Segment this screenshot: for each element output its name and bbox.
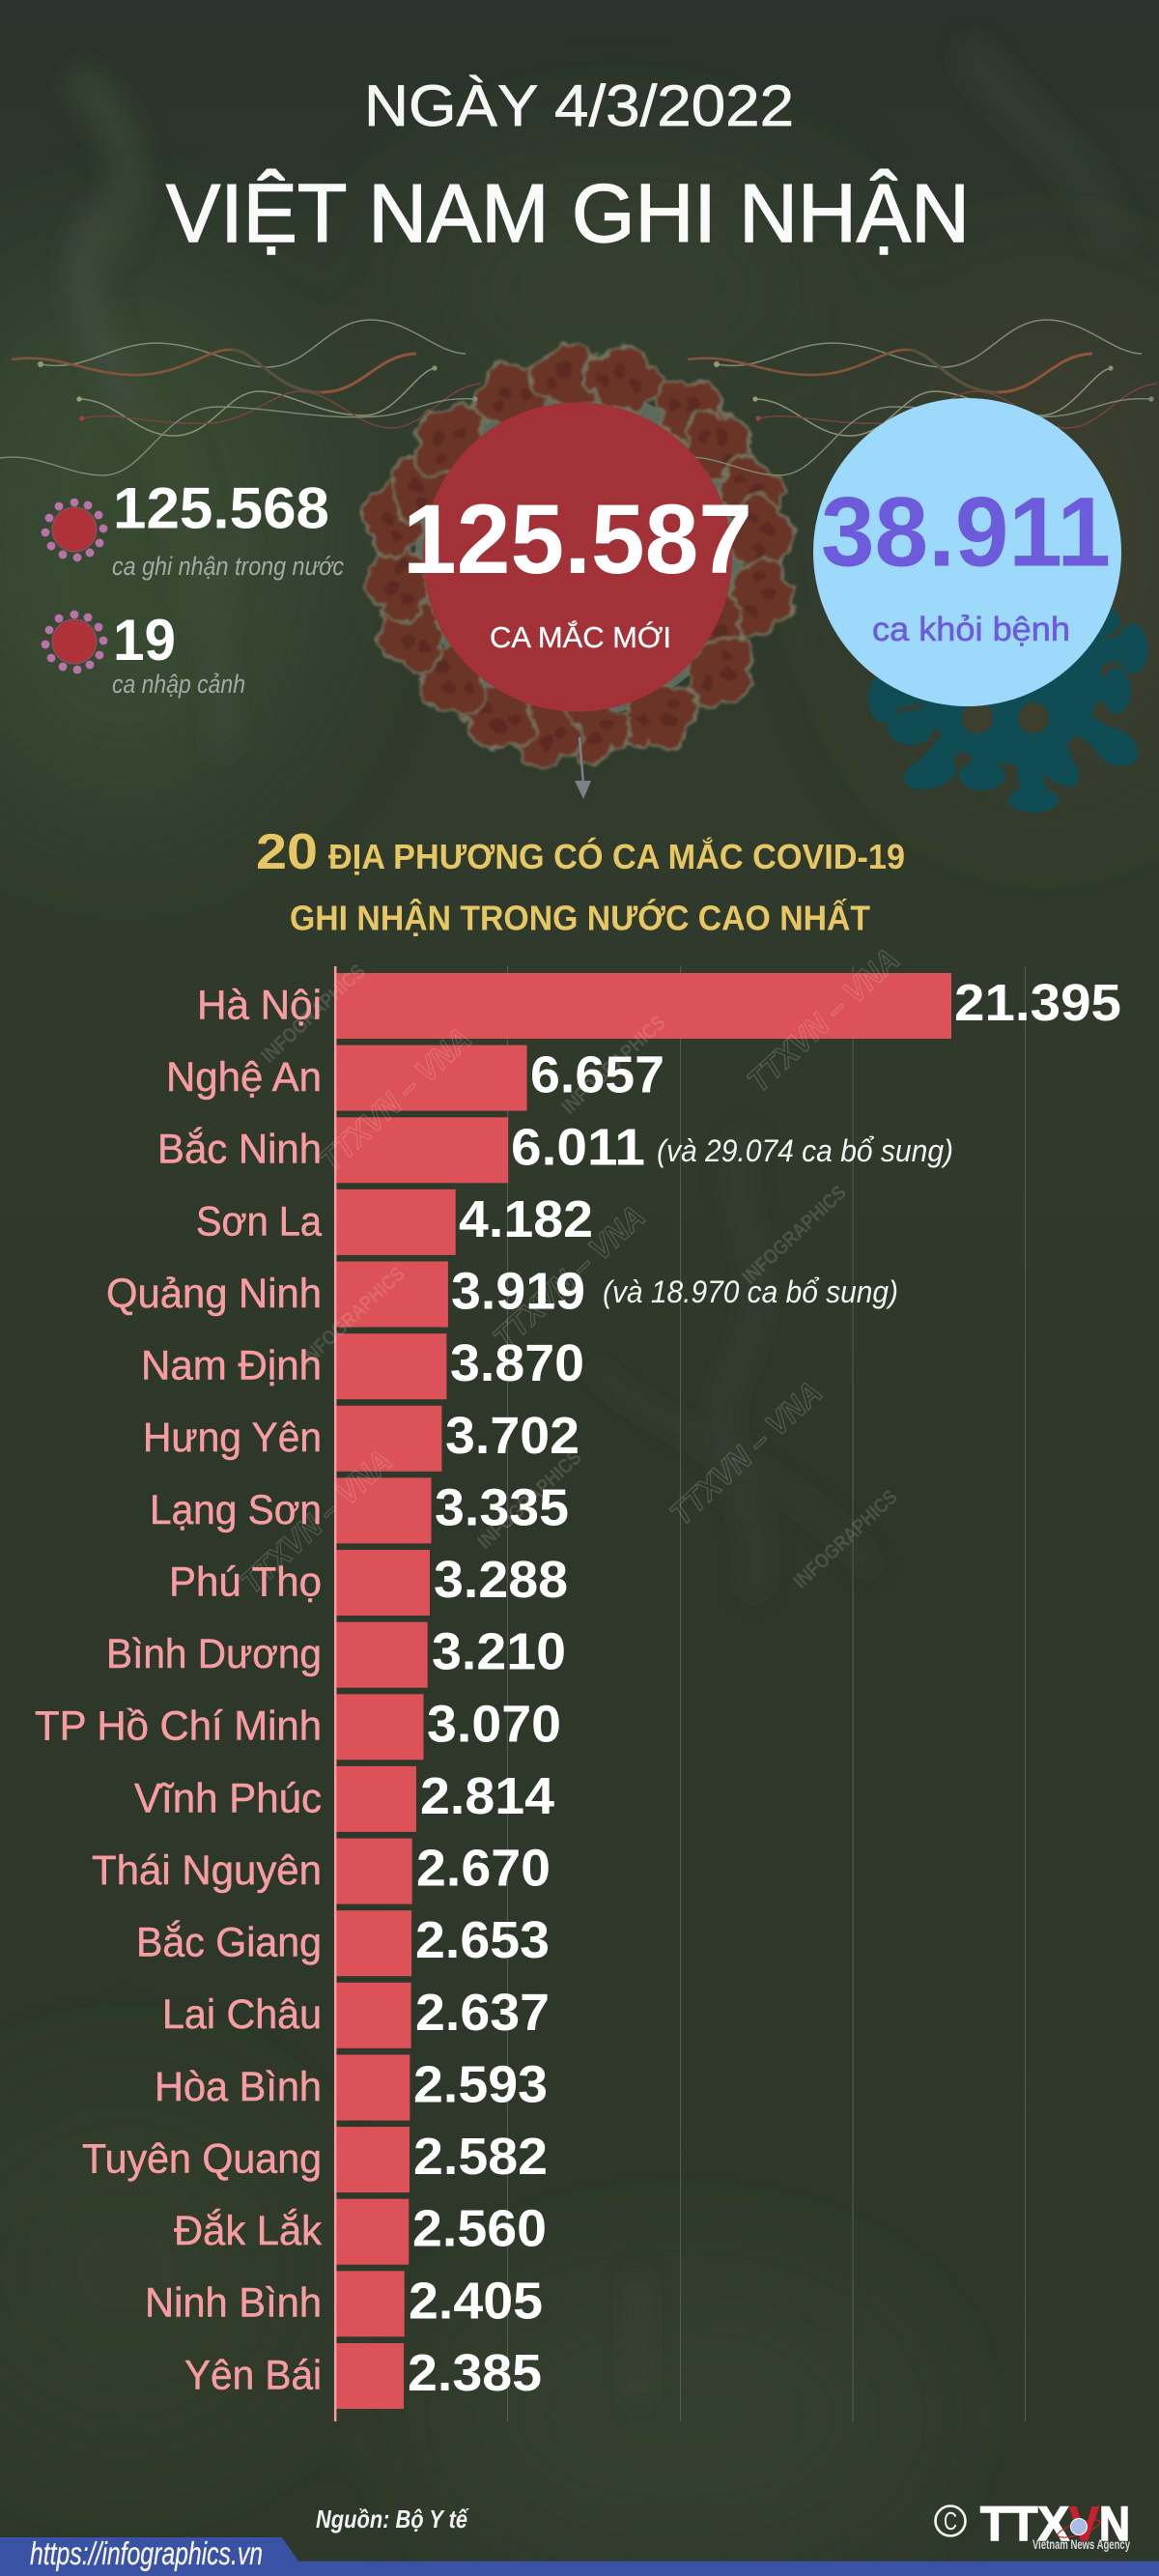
circle: recovered: ca khỏi bệnh <box>872 611 1070 648</box>
value labels: 21.395 <box>954 974 1121 1032</box>
value labels: 6.011 <box>511 1118 645 1176</box>
arrow <box>575 737 591 799</box>
logo: TTXVN <box>935 2497 1130 2552</box>
value labels: 3.070 <box>427 1695 561 1753</box>
stat: imported cases: ca nhập cảnh <box>112 670 245 699</box>
circle: recovered: 38.911 <box>821 477 1111 587</box>
value labels: 2.637 <box>415 1984 550 2042</box>
region labels: Hưng Yên <box>143 1415 322 1461</box>
watermarks <box>233 941 906 1600</box>
watermarks: INFOGRAPHICS <box>738 1182 851 1289</box>
region labels: Bình Dương <box>106 1631 322 1677</box>
region labels: Tuyên Quang <box>82 2135 322 2182</box>
value labels: 2.560 <box>412 2200 547 2258</box>
value labels: 3.702 <box>445 1407 580 1465</box>
icon: small virus <box>42 499 107 561</box>
stat: domestic cases: ca ghi nhận trong nước <box>112 552 344 581</box>
circle: new cases: CA MẮC MỚI <box>490 619 671 654</box>
region labels: Phú Thọ <box>169 1559 322 1605</box>
circle: recovered <box>813 398 1121 706</box>
region labels: Hà Nội <box>197 982 322 1028</box>
watermarks: TTXVN – VNA <box>740 941 906 1099</box>
bar chart <box>35 941 1121 2421</box>
note: Bắc Ninh additional cases: (và 29.074 ca bổ sung) <box>657 1133 953 1168</box>
value labels: 3.870 <box>450 1334 584 1392</box>
value labels: 2.653 <box>415 1911 550 1969</box>
note: Quảng Ninh additional cases: (và 18.970 ca bổ sung) <box>603 1274 898 1309</box>
wavy lines right <box>676 320 1157 475</box>
watermarks: INFOGRAPHICS <box>473 1446 586 1554</box>
watermarks: TTXVN – VNA <box>663 1374 829 1531</box>
region labels: Nam Định <box>141 1343 322 1389</box>
region labels: Yên Bái <box>184 2352 322 2398</box>
watermarks: TTXVN – VNA <box>233 1443 399 1600</box>
logo: TTXVN: C <box>944 2506 957 2535</box>
region labels: Nghệ An <box>166 1054 322 1101</box>
value labels: 2.405 <box>409 2272 543 2330</box>
stat: domestic cases: 125.568 <box>113 475 329 541</box>
value labels: 3.210 <box>432 1623 566 1681</box>
chart heading <box>256 824 905 937</box>
region labels: Bắc Ninh <box>157 1127 322 1173</box>
icon: large coronavirus <box>355 338 801 775</box>
icon: small virus 2 <box>42 611 107 673</box>
watermarks: TTXVN – VNA <box>486 1198 652 1356</box>
circle: new cases: 125.587 <box>403 484 752 594</box>
value labels: 2.385 <box>408 2344 542 2402</box>
region labels: Bắc Giang <box>136 1920 322 1966</box>
value labels: 2.582 <box>413 2128 548 2186</box>
region labels: Đắk Lắk <box>174 2208 322 2254</box>
region labels: Ninh Bình <box>145 2280 322 2327</box>
stat: imported cases: 19 <box>113 608 176 673</box>
value labels: 3.919 <box>451 1262 585 1320</box>
watermarks: INFOGRAPHICS <box>789 1486 902 1593</box>
region labels: Quảng Ninh <box>106 1271 322 1317</box>
footer band: https://infographics.vn <box>30 2535 263 2571</box>
region labels: Vĩnh Phúc <box>134 1775 322 1821</box>
value labels: 2.593 <box>413 2056 548 2114</box>
wavy lines left <box>0 320 481 475</box>
title: date: NGÀY 4/3/2022 <box>364 73 794 138</box>
region labels: Hòa Bình <box>155 2064 322 2110</box>
region labels <box>35 982 322 2398</box>
chart heading: ĐỊA PHƯƠNG CÓ CA MẮC COVID-19 <box>328 836 905 876</box>
region labels: Sơn La <box>196 1198 322 1245</box>
value labels: 4.182 <box>459 1190 593 1248</box>
value labels <box>408 974 1121 2402</box>
watermarks: INFOGRAPHICS <box>257 960 370 1068</box>
value labels: 2.814 <box>420 1767 554 1825</box>
watermarks: TTXVN – VNA <box>312 1020 478 1178</box>
chart heading: GHI NHẬN TRONG NƯỚC CAO NHẤT <box>290 897 870 937</box>
logo: TTXVN: N <box>1099 2497 1130 2551</box>
source: Nguồn: Bộ Y tế <box>316 2504 469 2533</box>
watermarks: INFOGRAPHICS <box>557 1012 670 1119</box>
icon: teal virus behind recovered circle <box>868 579 1148 813</box>
footer band <box>0 2535 1159 2576</box>
value labels: 6.657 <box>530 1046 664 1104</box>
bars <box>335 973 951 2409</box>
value labels: 2.670 <box>416 1840 551 1898</box>
value labels: 3.288 <box>434 1551 568 1609</box>
stat: imported cases <box>42 608 245 699</box>
watermarks: INFOGRAPHICS <box>297 1263 410 1370</box>
region labels: Lai Châu <box>162 1991 322 2038</box>
value labels: 3.335 <box>435 1478 569 1536</box>
title: headline: VIỆT NAM GHI NHẬN <box>166 168 970 260</box>
logo: TTXVN: V <box>1069 2497 1100 2551</box>
region labels: Lạng Sơn <box>150 1487 322 1533</box>
region labels: Thái Nguyên <box>92 1847 322 1894</box>
logo: TTXVN: TTX <box>980 2497 1069 2551</box>
region labels: TP Hồ Chí Minh <box>35 1703 322 1750</box>
circle: new cases <box>403 402 752 711</box>
stat: domestic cases <box>42 475 344 581</box>
chart heading: 20 <box>256 824 318 880</box>
